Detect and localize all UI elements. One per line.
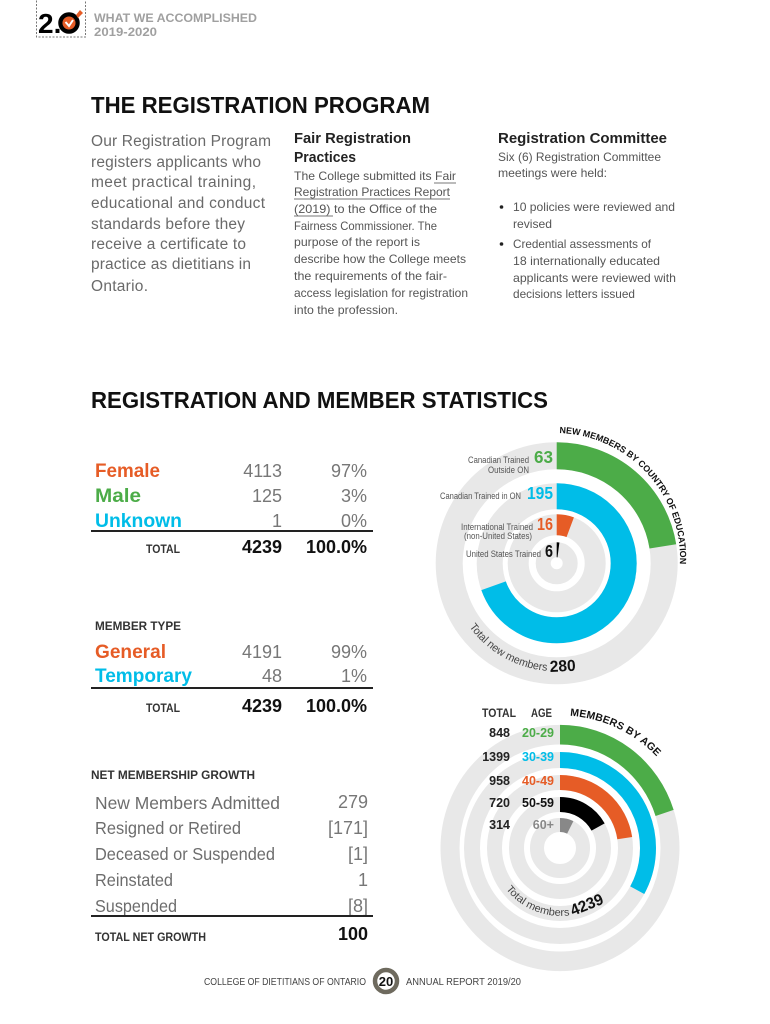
text block: registration committee: revised [513, 217, 552, 231]
text block: fair registration practices: into the profession. [294, 303, 398, 317]
table: net membership growth: [1] [348, 844, 368, 864]
footer [204, 970, 521, 992]
text block: registration committee: 18 internationally educated [513, 254, 660, 268]
text block: fair registration practices: Practices [294, 150, 356, 166]
table: net membership growth: TOTAL NET GROWTH [95, 930, 206, 944]
table: net membership growth: [171] [328, 818, 368, 838]
table: member type: General [95, 642, 166, 663]
table: gender: 0% [341, 511, 367, 531]
chart: new members by country of education: United States Trained [466, 549, 541, 559]
chart: members by age: 314 [489, 818, 510, 832]
table: net membership growth: [8] [348, 896, 368, 916]
intro paragraph: standards before they [91, 216, 245, 233]
table: gender: Male [95, 486, 141, 507]
table: gender: TOTAL [146, 542, 180, 556]
chart: members by age: 4239 [568, 891, 606, 920]
table: member type: Temporary [95, 666, 192, 687]
intro paragraph: receive a certificate to [91, 236, 246, 253]
footer: 20 [379, 974, 393, 989]
table: gender: Female [95, 461, 160, 482]
table: net membership growth: Suspended [95, 896, 177, 916]
table: member type: 1% [341, 666, 367, 686]
table: gender [91, 461, 373, 557]
chart: members by age: 30-39 [522, 750, 554, 764]
table: gender: 3% [341, 486, 367, 506]
chart: new members by country of education: 63 [534, 447, 553, 467]
chart: new members by country of education: Canadian Trained in ON [440, 491, 521, 501]
intro paragraph: educational and conduct [91, 195, 266, 212]
chart: new members by country of education: Outside ON [488, 465, 529, 475]
table: member type: 100.0% [306, 696, 367, 716]
text block: fair registration practices: Registration Practices Report [294, 185, 451, 199]
text block: registration committee: applicants were reviewed with [513, 271, 676, 285]
footer: COLLEGE OF DIETITIANS OF ONTARIO [204, 976, 366, 988]
chart: new members by country of education: (non-United States) [464, 531, 532, 541]
footer: ANNUAL REPORT 2019/20 [406, 976, 521, 988]
text block: fair registration practices: The College submitted its Fair [294, 169, 456, 183]
chart: new members by country of education: Total new members [471, 622, 547, 671]
chart: members by age: 1399 [482, 750, 510, 764]
table: net membership growth [91, 768, 373, 944]
chart: members by age: 720 [489, 796, 510, 810]
table: member type: 4239 [242, 696, 282, 716]
table: gender: Unknown [95, 511, 182, 532]
table: member type [91, 619, 373, 716]
text block: registration committee [498, 131, 676, 301]
text block: registration committee: Six (6) Registration Committee [498, 150, 661, 164]
text block: fair registration practices [294, 131, 468, 317]
intro paragraph: Ontario. [91, 278, 148, 295]
table: net membership growth: Reinstated [95, 870, 173, 890]
table: gender: 1 [272, 511, 282, 531]
chart: new members by country of education: 195 [527, 483, 553, 503]
chart: members by age: TOTAL [482, 706, 516, 720]
logo: 2.0 with check mark [36, 0, 86, 39]
table: member type: 48 [262, 666, 282, 686]
text block: registration committee: Credential assessments of [513, 237, 652, 251]
text block: fair registration practices: Fair Registration [294, 131, 411, 147]
table: net membership growth: NET MEMBERSHIP GROWTH [91, 768, 255, 782]
text block: fair registration practices: purpose of the report is [294, 235, 420, 249]
intro paragraph: registers applicants who [91, 154, 261, 171]
table: gender: 125 [252, 486, 282, 506]
chart: members by age: 50-59 [522, 796, 554, 810]
table: net membership growth: New Members Admitted [95, 793, 280, 813]
intro paragraph: practice as dietitians in [91, 256, 251, 273]
header label: 2019-2020 [94, 25, 157, 39]
text block: registration committee: Registration Committee [498, 131, 667, 147]
table: gender: 100.0% [306, 537, 367, 557]
chart: new members by country of education [436, 426, 686, 684]
chart: members by age [440, 706, 680, 971]
table: net membership growth: Resigned or Retired [95, 818, 241, 838]
header label [94, 11, 257, 39]
text block: fair registration practices: access legislation for registration [294, 286, 468, 300]
table: gender: 97% [331, 461, 367, 481]
table: gender: 4113 [243, 461, 282, 481]
table: net membership growth: 279 [338, 792, 368, 812]
chart: members by age: MEMBERS BY AGE [570, 708, 662, 756]
chart: new members by country of education: 16 [537, 514, 553, 534]
table: gender: 4239 [242, 537, 282, 557]
chart: new members by country of education: Canadian Trained [468, 455, 529, 465]
chart: members by age: 20-29 [522, 726, 554, 740]
text block: fair registration practices: describe how the College meets [294, 252, 466, 266]
text block: fair registration practices: Fairness Commissioner. The [294, 219, 437, 233]
chart: new members by country of education: 280 [549, 658, 576, 676]
chart: members by age: AGE [531, 706, 552, 720]
intro paragraph: meet practical training, [91, 174, 256, 191]
chart: members by age: 60+ [533, 818, 554, 832]
chart: members by age: Total members [508, 884, 570, 916]
table: member type: 4191 [242, 642, 282, 662]
table: net membership growth: 1 [358, 870, 368, 890]
table: member type: TOTAL [146, 701, 180, 715]
intro paragraph: Our Registration Program [91, 133, 271, 150]
chart: new members by country of education: 6 [545, 541, 553, 561]
chart: new members by country of education: NEW MEMBERS BY COUNTRY OF EDUCATION [560, 426, 686, 564]
heading: registration and member statistics: REGISTRATION AND MEMBER STATISTICS [91, 387, 548, 413]
intro paragraph [91, 133, 271, 295]
text block: fair registration practices: (2019) to the Office of the [294, 202, 437, 216]
text block: registration committee: meetings were held: [498, 166, 607, 180]
table: member type: 99% [331, 642, 367, 662]
header label: WHAT WE ACCOMPLISHED [94, 11, 257, 25]
text block: registration committee: decisions letters issued [513, 287, 635, 301]
chart: new members by country of education: International Trained [461, 522, 533, 532]
table: member type: MEMBER TYPE [95, 619, 181, 633]
table: net membership growth: Deceased or Suspended [95, 844, 275, 864]
text block: registration committee: 10 policies were reviewed and [513, 200, 675, 214]
title: the registration program: THE REGISTRATION PROGRAM [91, 92, 430, 118]
chart: members by age: 958 [489, 774, 510, 788]
chart: members by age: 40-49 [522, 774, 554, 788]
table: net membership growth: 100 [338, 924, 368, 944]
chart: members by age: 848 [489, 726, 510, 740]
logo: 2.0 with check mark: 2. [38, 8, 61, 39]
text block: fair registration practices: the requirements of the fair- [294, 269, 447, 283]
